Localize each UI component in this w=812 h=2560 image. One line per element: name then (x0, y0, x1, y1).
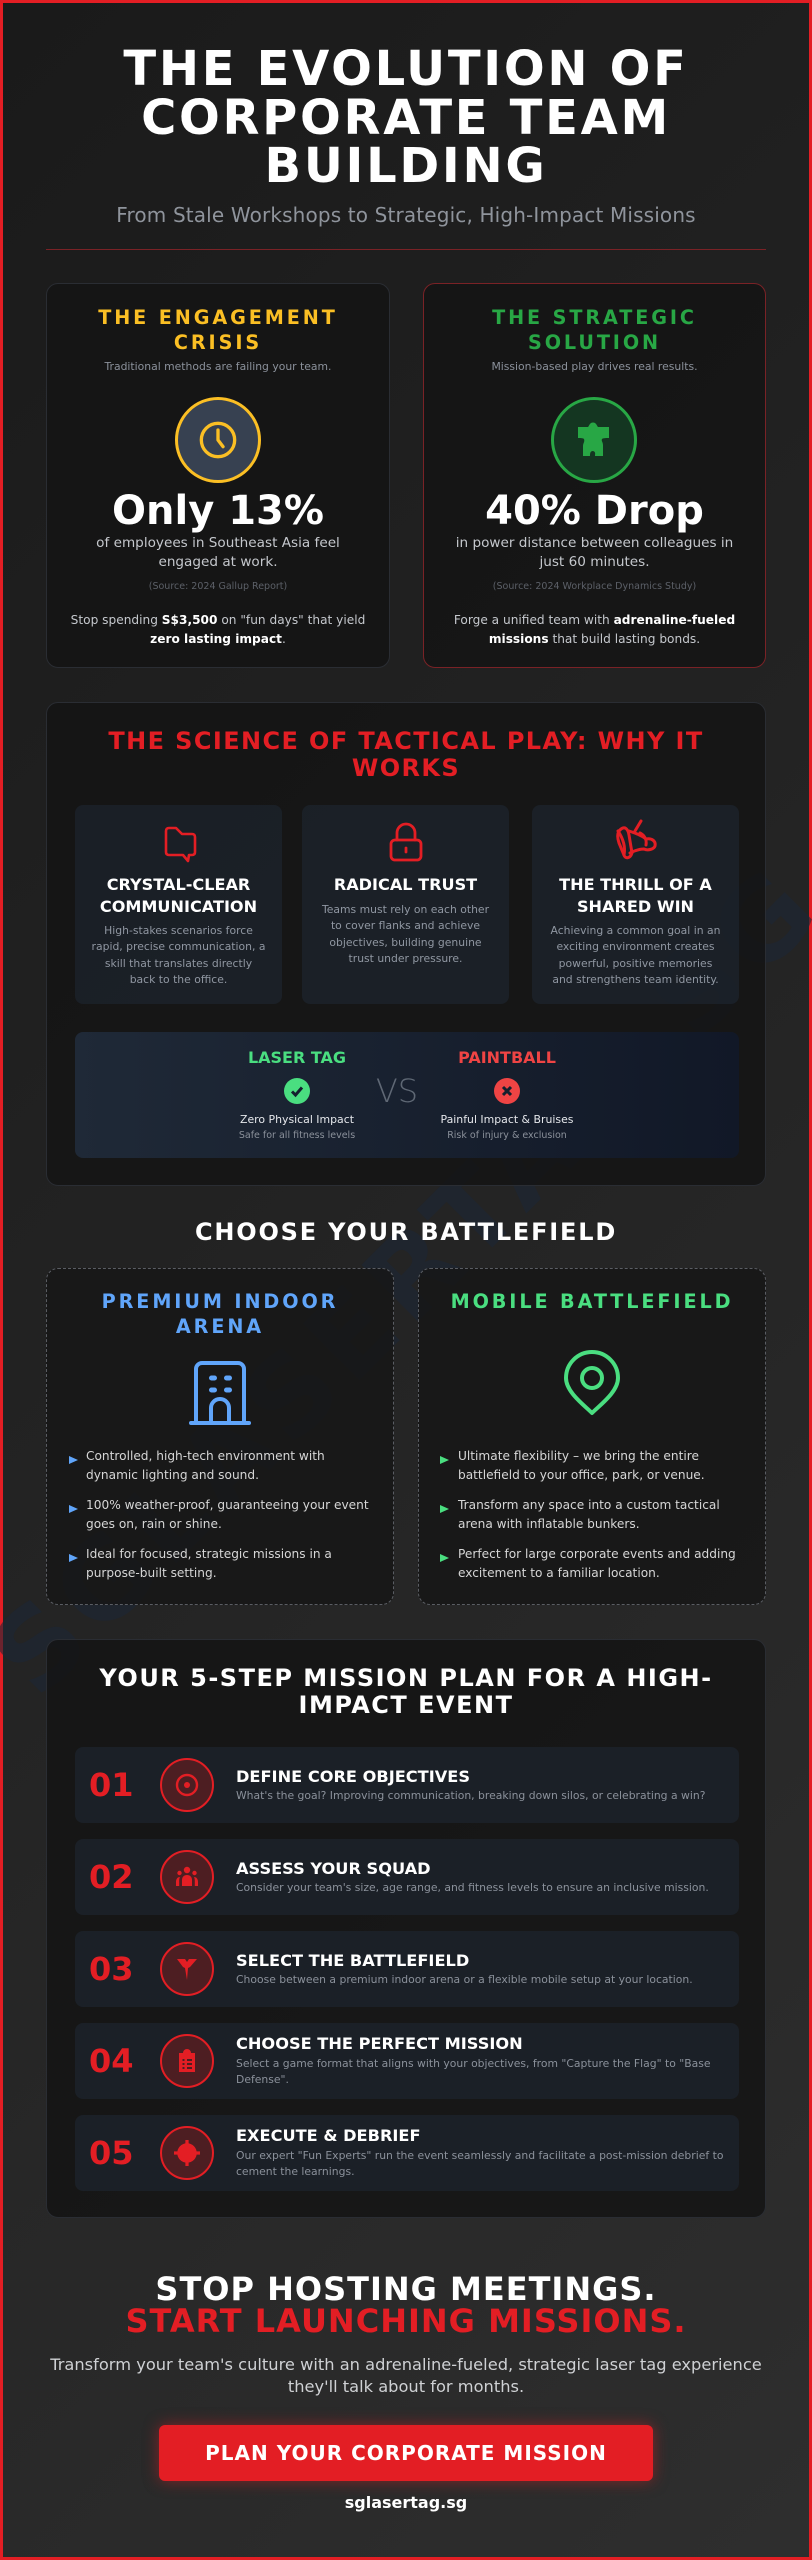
bullet list: Controlled, high-tech environment with (86, 1449, 325, 1463)
icon: map pin (564, 1350, 620, 1416)
panel: 5-step mission plan (46, 1639, 766, 2218)
icon: puzzle (551, 397, 637, 483)
heading: strategic solution (492, 306, 697, 354)
step 01: 01 (89, 1766, 134, 1804)
step 01: What's the goal? Improving communication, breaking down silos, or celebrating a win? (236, 1789, 705, 1802)
description: to cover flanks and achieve (331, 919, 480, 932)
title: BUILDING (265, 138, 547, 194)
step 05: cement the learnings. (236, 2165, 355, 2178)
heading: 5-step mission plan: IMPACT EVENT (299, 1691, 513, 1719)
step 05: EXECUTE & DEBRIEF (236, 2126, 421, 2145)
step 05: 05 (89, 2134, 134, 2172)
call to action text: zero lasting impact. (150, 632, 286, 646)
description: and strengthens team identity. (552, 973, 719, 986)
step 04 (75, 2023, 739, 2099)
heading: COMMUNICATION (100, 897, 257, 916)
closing text: Transform your team's culture with an adrenaline-fueled, strategic laser tag experience (50, 2355, 762, 2374)
description (92, 924, 265, 986)
panel: science of tactical play (46, 702, 766, 1186)
icon: target (160, 1758, 214, 1812)
bullet list: Ideal for focused, strategic missions in a (86, 1547, 332, 1561)
description: Achieving a common goal in an (551, 924, 720, 937)
heading: science of tactical play (108, 727, 704, 782)
step 05: Our expert "Fun Experts" run the event seamlessly and facilitate a post-mission debrief to (236, 2149, 723, 2162)
panel: premium indoor arena (46, 1268, 394, 1605)
icon: cross (494, 1078, 520, 1104)
card: shared win (532, 805, 739, 1004)
paintball column (441, 1048, 573, 1141)
heading: 5-step mission plan: YOUR 5-STEP MISSION PLAN FOR A HIGH- (99, 1664, 713, 1692)
description: back to the office. (130, 973, 227, 986)
call to action text: missions that build lasting bonds. (489, 632, 700, 646)
heading: strategic solution: SOLUTION (528, 330, 661, 354)
panel: mobile battlefield (418, 1268, 766, 1605)
description (550, 924, 720, 986)
description: rapid, precise communication, a (92, 940, 265, 953)
heading: engagement crisis: CRISIS (174, 330, 262, 354)
description: objectives, building genuine (329, 936, 482, 949)
description: High-stakes scenarios force (104, 924, 253, 937)
source: (Source: 2024 Gallup Report) (149, 581, 287, 592)
closing headline (125, 2270, 687, 2340)
panel: strategic solution (423, 283, 766, 668)
heading: science of tactical play: THE SCIENCE OF TACTICAL PLAY: WHY IT (108, 727, 704, 755)
step 04: Select a game format that aligns with your objectives, from "Capture the Flag" to "Base (236, 2057, 711, 2070)
icon: team (160, 1850, 214, 1904)
heading: RADICAL TRUST (334, 875, 477, 894)
icon: clock (175, 397, 261, 483)
heading: engagement crisis (98, 306, 338, 354)
title: CORPORATE TEAM (141, 90, 671, 146)
heading: strategic solution: THE STRATEGIC (492, 306, 697, 329)
heading: ARENA (176, 1314, 264, 1338)
tagline: Traditional methods are failing your team. (104, 360, 332, 373)
label: PAINTBALL (458, 1048, 556, 1067)
card: communication (75, 805, 282, 1004)
icon: building (189, 1361, 251, 1425)
description: Teams must rely on each other (322, 903, 489, 916)
step 02: 02 (89, 1858, 134, 1896)
description: skill that translates directly (105, 957, 252, 970)
benefit: Painful Impact & Bruises (441, 1113, 573, 1126)
bullet list: 100% weather-proof, guaranteeing your event (86, 1498, 369, 1512)
icon: dart (160, 1942, 214, 1996)
heading: THE THRILL OF A (559, 875, 712, 894)
heading: SHARED WIN (577, 897, 694, 916)
bullet list: arena with inflatable bunkers. (458, 1517, 640, 1531)
source: (Source: 2024 Workplace Dynamics Study) (493, 581, 696, 592)
closing text (50, 2355, 762, 2396)
bullet list: Perfect for large corporate events and adding (458, 1547, 736, 1561)
button: plan your corporate mission (159, 2425, 653, 2481)
note: Safe for all fitness levels (239, 1130, 355, 1141)
button: plan your corporate mission: PLAN YOUR CORPORATE MISSION (205, 2441, 607, 2465)
stat: 40% drop: 40% Drop (485, 488, 704, 534)
card: radical trust (302, 805, 509, 1004)
tagline: Mission-based play drives real results. (491, 360, 698, 373)
panel: engagement crisis (46, 283, 390, 668)
bullet list: Ultimate flexibility – we bring the entire (458, 1449, 699, 1463)
heading: science of tactical play: WORKS (352, 754, 460, 782)
stat description: in power distance between colleagues in (456, 535, 733, 551)
heading: CRYSTAL-CLEAR (107, 875, 250, 894)
call to action text (454, 613, 735, 646)
step 05 (75, 2115, 739, 2191)
subtitle: From Stale Workshops to Strategic, High-Impact Missions (116, 203, 696, 227)
step 03: Choose between a premium indoor arena or a flexible mobile setup at your location. (236, 1973, 693, 1986)
step 03: SELECT THE BATTLEFIELD (236, 1951, 469, 1970)
bullet list: battlefield to your office, park, or venue. (458, 1468, 705, 1482)
closing headline: STOP HOSTING MEETINGS. (155, 2270, 657, 2308)
heading (559, 875, 712, 916)
bullet list: goes on, rain or shine. (86, 1517, 222, 1531)
step 03: 03 (89, 1950, 134, 1988)
step 02: ASSESS YOUR SQUAD (236, 1859, 431, 1878)
icon: lock (390, 822, 422, 862)
website: sglasertag.sg (345, 2493, 467, 2512)
description: powerful, positive memories (559, 957, 712, 970)
step 03 (75, 1931, 739, 2007)
closing headline: START LAUNCHING MISSIONS. (125, 2302, 687, 2340)
heading (102, 1290, 338, 1338)
stat description (456, 535, 733, 570)
laser tag column (239, 1048, 355, 1141)
description: exciting environment creates (556, 940, 715, 953)
stat description: engaged at work. (158, 554, 278, 570)
call to action text: Forge a unified team with adrenaline-fueled (454, 613, 735, 627)
heading: engagement crisis: THE ENGAGEMENT (98, 306, 338, 329)
bullet list: dynamic lighting and sound. (86, 1468, 259, 1482)
call to action text: Stop spending S$3,500 on "fun days" that yield (71, 613, 365, 627)
step 01 (75, 1747, 739, 1823)
heading: PREMIUM INDOOR (102, 1290, 338, 1313)
icon: speech bubble (164, 826, 196, 862)
step 04: 04 (89, 2042, 134, 2080)
bullet list: excitement to a familiar location. (458, 1566, 660, 1580)
description: trust under pressure. (349, 952, 462, 965)
step 01: DEFINE CORE OBJECTIVES (236, 1767, 470, 1786)
step 02 (75, 1839, 739, 1915)
label: LASER TAG (248, 1048, 346, 1067)
call to action text (71, 613, 365, 646)
heading (100, 875, 257, 916)
bullet list (440, 1449, 736, 1580)
step 04: CHOOSE THE PERFECT MISSION (236, 2034, 523, 2053)
stat description: of employees in Southeast Asia feel (96, 535, 340, 551)
bullet list: purpose-built setting. (86, 1566, 217, 1580)
icon: check (284, 1078, 310, 1104)
note: Risk of injury & exclusion (447, 1130, 567, 1141)
stat: only 13%: Only 13% (112, 488, 324, 534)
vs: VS (376, 1072, 418, 1110)
step 02: Consider your team's size, age range, and fitness levels to ensure an inclusive mission. (236, 1881, 709, 1894)
icon: crosshair (160, 2126, 214, 2180)
stat description: just 60 minutes. (539, 554, 650, 570)
bullet list (69, 1449, 369, 1580)
heading: MOBILE BATTLEFIELD (451, 1290, 733, 1313)
stat description (96, 535, 340, 570)
benefit: Zero Physical Impact (240, 1113, 354, 1126)
icon: clipboard (160, 2034, 214, 2088)
bullet list: Transform any space into a custom tactical (458, 1498, 720, 1512)
comparison: laser tag vs paintball (75, 1032, 739, 1158)
title (123, 41, 689, 194)
closing text: they'll talk about for months. (288, 2376, 524, 2396)
step 04: Defense". (236, 2073, 289, 2086)
icon: party horn (616, 819, 657, 860)
heading: choose your battlefield: CHOOSE YOUR BATTLEFIELD (195, 1218, 617, 1246)
heading: 5-step mission plan (99, 1664, 713, 1719)
title: THE EVOLUTION OF (123, 41, 689, 97)
description (322, 903, 490, 965)
